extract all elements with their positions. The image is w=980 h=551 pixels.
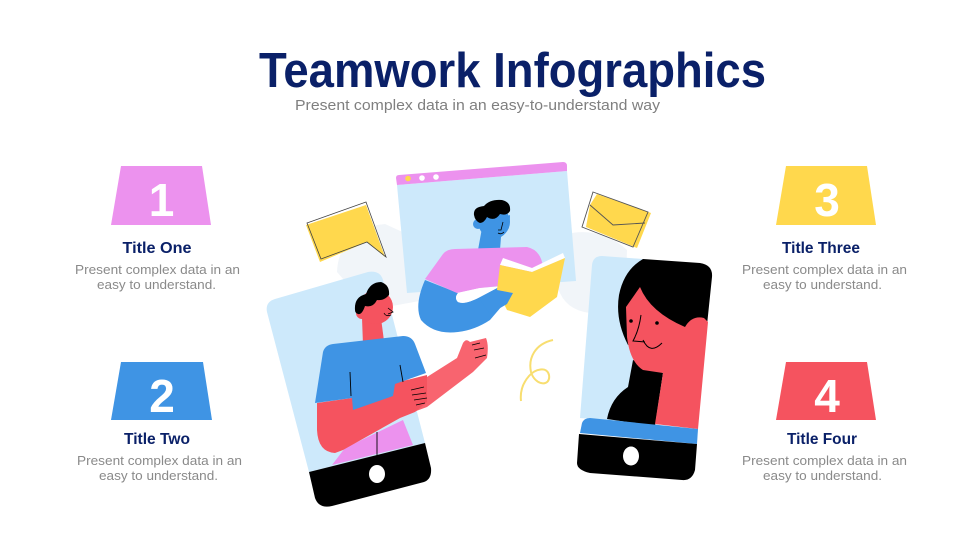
text: description one: Present complex data in an bbox=[75, 263, 240, 277]
text: description three: easy to understand. bbox=[763, 278, 882, 292]
badge 1 bbox=[111, 166, 211, 226]
badge 2: 2 bbox=[149, 370, 175, 422]
video window bbox=[396, 162, 576, 293]
text: description four: easy to understand. bbox=[763, 469, 882, 483]
person with waving hand bbox=[315, 282, 488, 465]
heading: Title One: Title One bbox=[122, 240, 192, 257]
text: description one bbox=[75, 263, 240, 292]
item 1 bbox=[75, 166, 240, 292]
heading: Title Three: Title Three bbox=[782, 240, 860, 257]
man with book bbox=[418, 200, 565, 332]
badge 3: 3 bbox=[814, 174, 840, 226]
item 4 bbox=[742, 362, 907, 483]
text: description three bbox=[742, 263, 907, 292]
heading: Title Two: Title Two bbox=[124, 431, 190, 448]
title: Teamwork Infographics bbox=[259, 44, 766, 98]
badge 4 bbox=[776, 362, 876, 422]
speech bubble icon bbox=[306, 202, 386, 262]
badge 3 bbox=[776, 166, 876, 226]
badge 1: 1 bbox=[149, 174, 174, 226]
badge 4: 4 bbox=[814, 370, 840, 422]
text: description one: easy to understand. bbox=[97, 278, 216, 292]
yellow squiggle bbox=[521, 340, 553, 401]
text: description three: Present complex data in an bbox=[742, 263, 907, 277]
text: description two bbox=[77, 454, 242, 483]
heading: Title Four: Title Four bbox=[787, 431, 857, 448]
item 2 bbox=[77, 362, 242, 483]
woman bbox=[607, 259, 712, 429]
right phone bbox=[577, 256, 712, 480]
text: description two: easy to understand. bbox=[99, 469, 218, 483]
text: description two: Present complex data in an bbox=[77, 454, 242, 468]
text: description four: Present complex data in an bbox=[742, 454, 907, 468]
envelope icon bbox=[582, 192, 651, 248]
badge 2 bbox=[111, 362, 212, 422]
subtitle: Present complex data in an easy-to-understand way bbox=[295, 97, 661, 114]
item 3 bbox=[742, 166, 907, 292]
text: description four bbox=[742, 454, 907, 483]
left phone bbox=[267, 272, 488, 507]
central illustration bbox=[267, 162, 712, 507]
background blobs bbox=[337, 224, 627, 313]
